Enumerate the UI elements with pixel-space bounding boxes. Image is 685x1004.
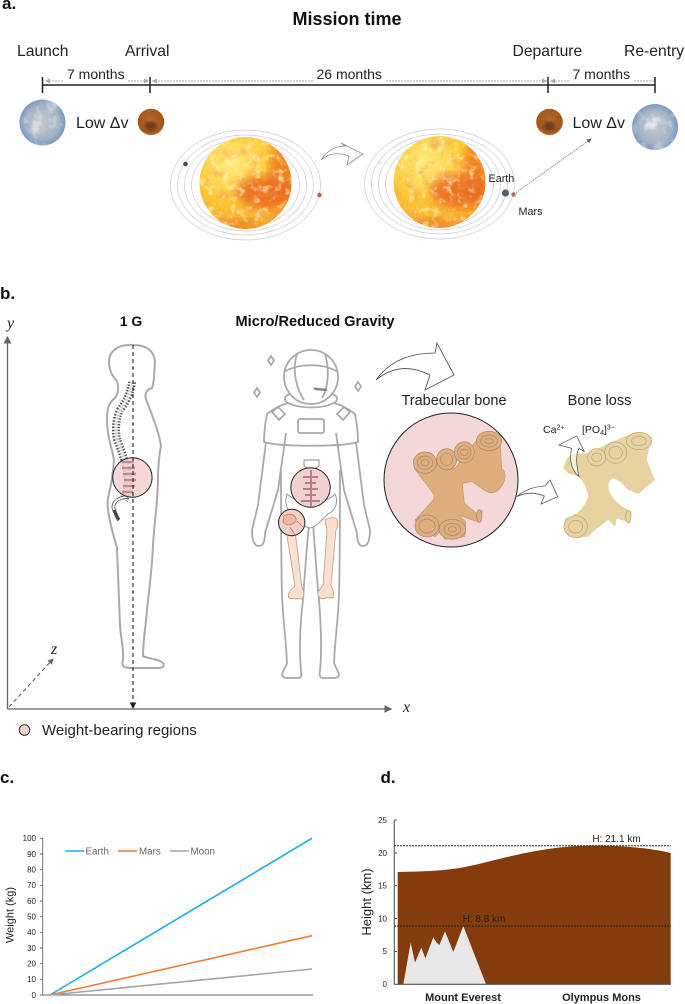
icon: bone with loss xyxy=(559,432,655,538)
axes and ticks: 80 xyxy=(27,866,37,874)
axes and ticks: 15 xyxy=(378,882,388,890)
icon: mars left xyxy=(138,109,164,135)
olympus mons silhouette xyxy=(398,846,671,984)
y-axis title: Height (km) xyxy=(359,868,374,936)
weight-bearing circle: hip xyxy=(278,509,305,536)
y-axis title: Weight (kg) xyxy=(4,887,16,943)
heading: 1 G: 1 G xyxy=(120,313,142,329)
category labels: Mount Everest xyxy=(425,992,501,1004)
panel c: weight line chart xyxy=(0,768,313,1000)
heading: bone loss: Bone loss xyxy=(568,393,631,409)
axes and ticks xyxy=(378,816,671,989)
axes and ticks: 25 xyxy=(378,816,388,825)
label: phosphate: 3− xyxy=(607,424,615,432)
mount everest silhouette xyxy=(403,926,486,984)
label d: d. xyxy=(380,768,396,787)
milestone labels: Arrival xyxy=(125,43,169,60)
icon: sparkles xyxy=(254,356,361,397)
arrow: between solar systems xyxy=(321,143,363,165)
line: mars xyxy=(50,936,312,995)
axes and ticks xyxy=(23,834,313,1000)
icon: healthy bone xyxy=(413,431,505,539)
category labels: Olympus Mons xyxy=(562,992,641,1004)
delta-v label right: Low Δv xyxy=(572,115,625,132)
figure: standing profile xyxy=(107,345,164,708)
axes and ticks: 100 xyxy=(23,834,37,843)
heading: micro/reduced gravity: Micro/Reduced Gravity xyxy=(236,314,395,330)
icon: suit torso and limbs xyxy=(252,394,370,678)
reference line: 21.1 km: H: 21.1 km xyxy=(592,834,641,845)
arrow: to bone loss xyxy=(517,480,558,504)
legend: Earth xyxy=(86,846,109,858)
arrow: astronaut to trabecular bone xyxy=(376,343,454,390)
axes: y xyxy=(5,315,15,332)
axes and ticks: 5 xyxy=(383,947,388,956)
legend: Moon xyxy=(190,846,215,858)
axes and ticks: 10 xyxy=(27,975,37,984)
axes and ticks: 10 xyxy=(378,914,388,924)
label: mars: Mars xyxy=(518,206,543,218)
timeline: 26 months xyxy=(316,66,382,82)
axes and ticks: 0 xyxy=(32,991,37,1000)
legend xyxy=(65,846,215,858)
milestone labels: Departure xyxy=(512,43,583,60)
reference line: 8.8 km: H: 8.8 km xyxy=(463,914,505,925)
figure: astronaut xyxy=(252,350,370,678)
icon: solar system at departure xyxy=(364,129,516,239)
icon: lumbar spine top xyxy=(304,460,319,472)
timeline xyxy=(42,66,655,93)
icon: mars right xyxy=(536,109,563,135)
milestone labels: Re-entry xyxy=(624,43,684,60)
milestone labels: Launch xyxy=(17,43,68,60)
label: earth: Earth xyxy=(488,173,514,185)
axes: x xyxy=(402,699,410,716)
axes xyxy=(5,315,410,716)
icon: earth left xyxy=(20,100,66,146)
icon: pelvis xyxy=(286,494,337,528)
panel d: mountain height chart xyxy=(359,768,671,1004)
weight-bearing circle xyxy=(113,458,152,497)
heading: trabecular bone: Trabecular bone xyxy=(401,393,507,409)
milestone labels xyxy=(17,43,684,60)
line: earth xyxy=(50,838,312,995)
axes and ticks: 30 xyxy=(27,944,37,953)
title: mission time: Mission time xyxy=(292,9,402,29)
axes and ticks: 50 xyxy=(27,912,37,922)
axes and ticks: 70 xyxy=(27,881,37,890)
axes and ticks: 90 xyxy=(27,850,37,859)
spine xyxy=(113,382,132,520)
timeline: 7 months xyxy=(67,66,125,82)
delta-v label left: Low Δv xyxy=(76,115,128,132)
axes and ticks: 20 xyxy=(27,960,37,968)
label b: b. xyxy=(0,284,15,303)
panel b: gravity and bone loss xyxy=(0,284,655,739)
label: phosphate: [PO xyxy=(582,424,600,436)
axes and ticks: 40 xyxy=(27,928,37,937)
label: calcium: Ca xyxy=(543,424,556,436)
icon: earth right xyxy=(632,104,678,150)
icon: helmet xyxy=(284,350,338,404)
axes and ticks: 0 xyxy=(383,980,388,989)
arrow: ion release xyxy=(559,436,584,477)
line: moon xyxy=(50,969,312,995)
weight-bearing circle: spine xyxy=(291,468,330,507)
trajectory arrow xyxy=(514,139,591,194)
category labels xyxy=(425,992,641,1004)
label: calcium: 2+ xyxy=(556,424,564,432)
axes: z xyxy=(50,641,58,658)
icon: solar system at arrival xyxy=(170,130,322,240)
icon: femurs xyxy=(286,518,338,599)
label c: c. xyxy=(0,768,14,787)
legend: Mars xyxy=(139,846,161,858)
centre of gravity line xyxy=(132,345,134,708)
legend: weight-bearing regions: Weight-bearing regions xyxy=(42,722,197,739)
circle: trabecular bone xyxy=(384,413,518,547)
panel a: mission time xyxy=(2,0,684,240)
axes and ticks: 20 xyxy=(378,849,388,858)
label: phosphate: ] xyxy=(604,424,607,436)
label: phosphate: 4 xyxy=(600,430,604,437)
axes and ticks: 60 xyxy=(27,897,37,906)
timeline: 7 months xyxy=(572,66,630,82)
